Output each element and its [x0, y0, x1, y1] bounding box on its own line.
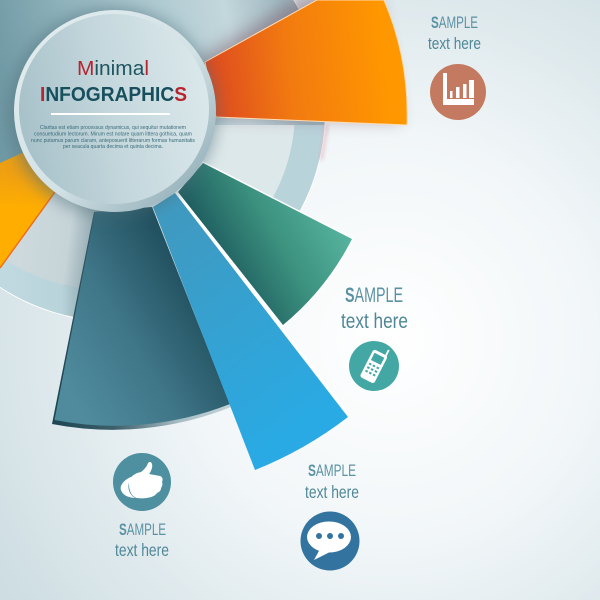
- label: middle right: SAMPLE: [345, 284, 403, 307]
- intro paragraph: consuetudium lectorum. Mirum est notare quam littera gothica, quam: [34, 132, 192, 138]
- icon: bar chart: [430, 64, 486, 120]
- icon: speech bubble: [300, 512, 360, 570]
- intro paragraph: per seacula quarta decima et quinta decima.: [63, 144, 163, 150]
- wedge: blue: [153, 192, 349, 470]
- label: bottom left: [115, 520, 169, 560]
- label: middle right: [341, 284, 408, 333]
- intro paragraph: nunc putamus parum claram, anteposuerit litterarum formas humanitatis: [31, 138, 195, 144]
- intro paragraph: [31, 125, 195, 150]
- icon: thumbs up: [113, 453, 171, 511]
- background ring disc: [0, 0, 330, 318]
- icon: mobile phone: [349, 341, 399, 391]
- label: top right: SAMPLE: [431, 14, 478, 32]
- label: top right: [428, 14, 481, 53]
- wedge: yellow: [0, 111, 115, 268]
- label: bottom middle: text here: [305, 482, 359, 502]
- shadow of orange wedge: [199, 0, 401, 122]
- title: INFOGRAPHICS: INFOGRAPHICS: [40, 84, 187, 106]
- wedge: dark teal: [52, 207, 231, 430]
- label: bottom middle: SAMPLE: [308, 461, 356, 480]
- label: top right: text here: [428, 34, 481, 53]
- intro paragraph: Claritas est etiam processus dynamicus, qui sequitur mutationem: [40, 125, 186, 131]
- main circle: [14, 10, 216, 212]
- divider: [51, 113, 170, 115]
- title: Minimal: Minimal: [77, 58, 149, 80]
- label: middle right: text here: [341, 310, 408, 333]
- shadow of main circle: [9, 8, 217, 216]
- label: bottom left: text here: [115, 540, 169, 560]
- wedge: green: [178, 163, 352, 325]
- label: bottom middle: [305, 461, 359, 502]
- wedge: orange: [205, 0, 407, 125]
- label: bottom left: SAMPLE: [119, 520, 166, 539]
